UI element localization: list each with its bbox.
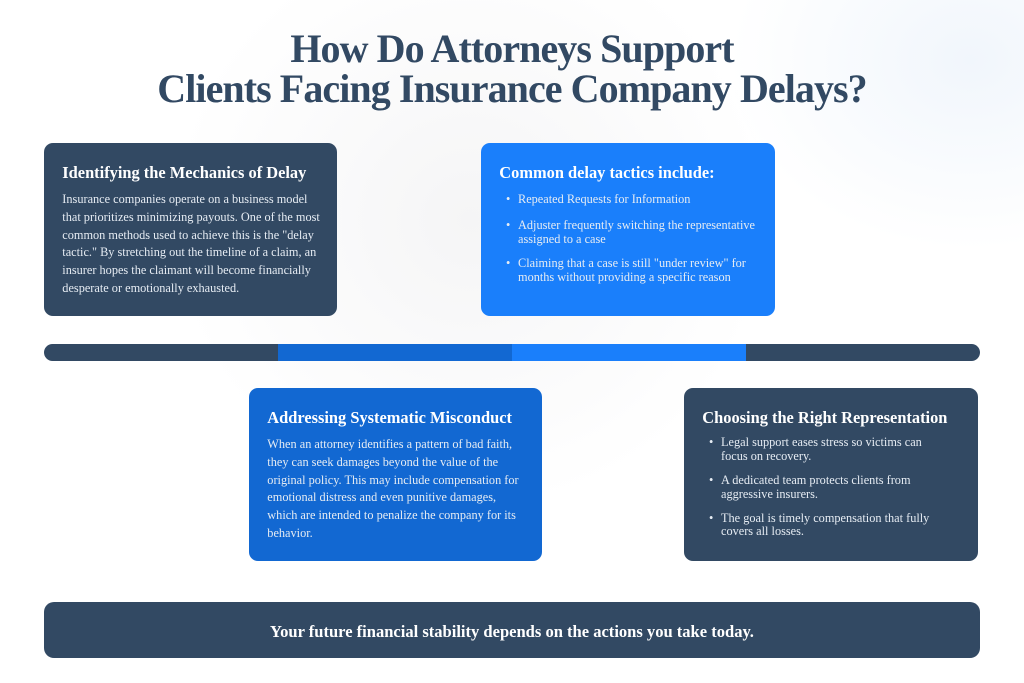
bullet: timely compensation: The goal is timely compensation that fully covers all losses. bbox=[721, 510, 929, 538]
heading: common delay tactics: Common delay tactics include: bbox=[499, 163, 715, 182]
closing banner: Your future financial stability depends on the actions you take today. bbox=[270, 622, 754, 641]
title: Clients Facing Insurance Company Delays? bbox=[157, 66, 867, 111]
closing banner bbox=[44, 602, 980, 658]
timeline bar bbox=[44, 344, 980, 361]
panel: identifying the mechanics of delay bbox=[44, 143, 337, 316]
bullet: dedicated team: A dedicated team protects clients from aggressive insurers. bbox=[721, 473, 911, 501]
title: How Do Attorneys Support bbox=[290, 26, 734, 71]
text block: systematic misconduct: When an attorney identifies a pattern of bad faith, they can seek damages beyond the value of the original policy. This may include compensation for emotional distress and even punitive damages, which are intended to penalize the company for its behavior. bbox=[267, 437, 519, 540]
bullet: repeated requests: Repeated Requests for Information bbox=[518, 192, 690, 206]
panel: common delay tactics bbox=[481, 143, 775, 316]
title bbox=[157, 26, 867, 111]
text block: mechanics of delay: Insurance companies operate on a business model that prioritizes minimizing payouts. One of the most common methods used to achieve this is the "delay tactic." By stretching out the timeline of a claim, an insurer hopes the claimant will become financially desperate or emotionally exhausted. bbox=[62, 192, 320, 295]
panel: choosing the right representation bbox=[684, 388, 978, 561]
bullet: adjuster switching: Adjuster frequently switching the representative assigned to a case bbox=[518, 218, 755, 246]
panel: addressing systematic misconduct bbox=[249, 388, 542, 561]
bullet: legal support: Legal support eases stress so victims can focus on recovery. bbox=[721, 435, 922, 463]
heading: identifying the mechanics of delay: Identifying the Mechanics of Delay bbox=[62, 163, 306, 182]
heading: choosing the right representation: Choosing the Right Representation bbox=[702, 408, 947, 427]
bullet: under review: Claiming that a case is still "under review" for months without providing a specific reason bbox=[518, 256, 746, 284]
heading: addressing systematic misconduct: Addressing Systematic Misconduct bbox=[267, 408, 512, 427]
